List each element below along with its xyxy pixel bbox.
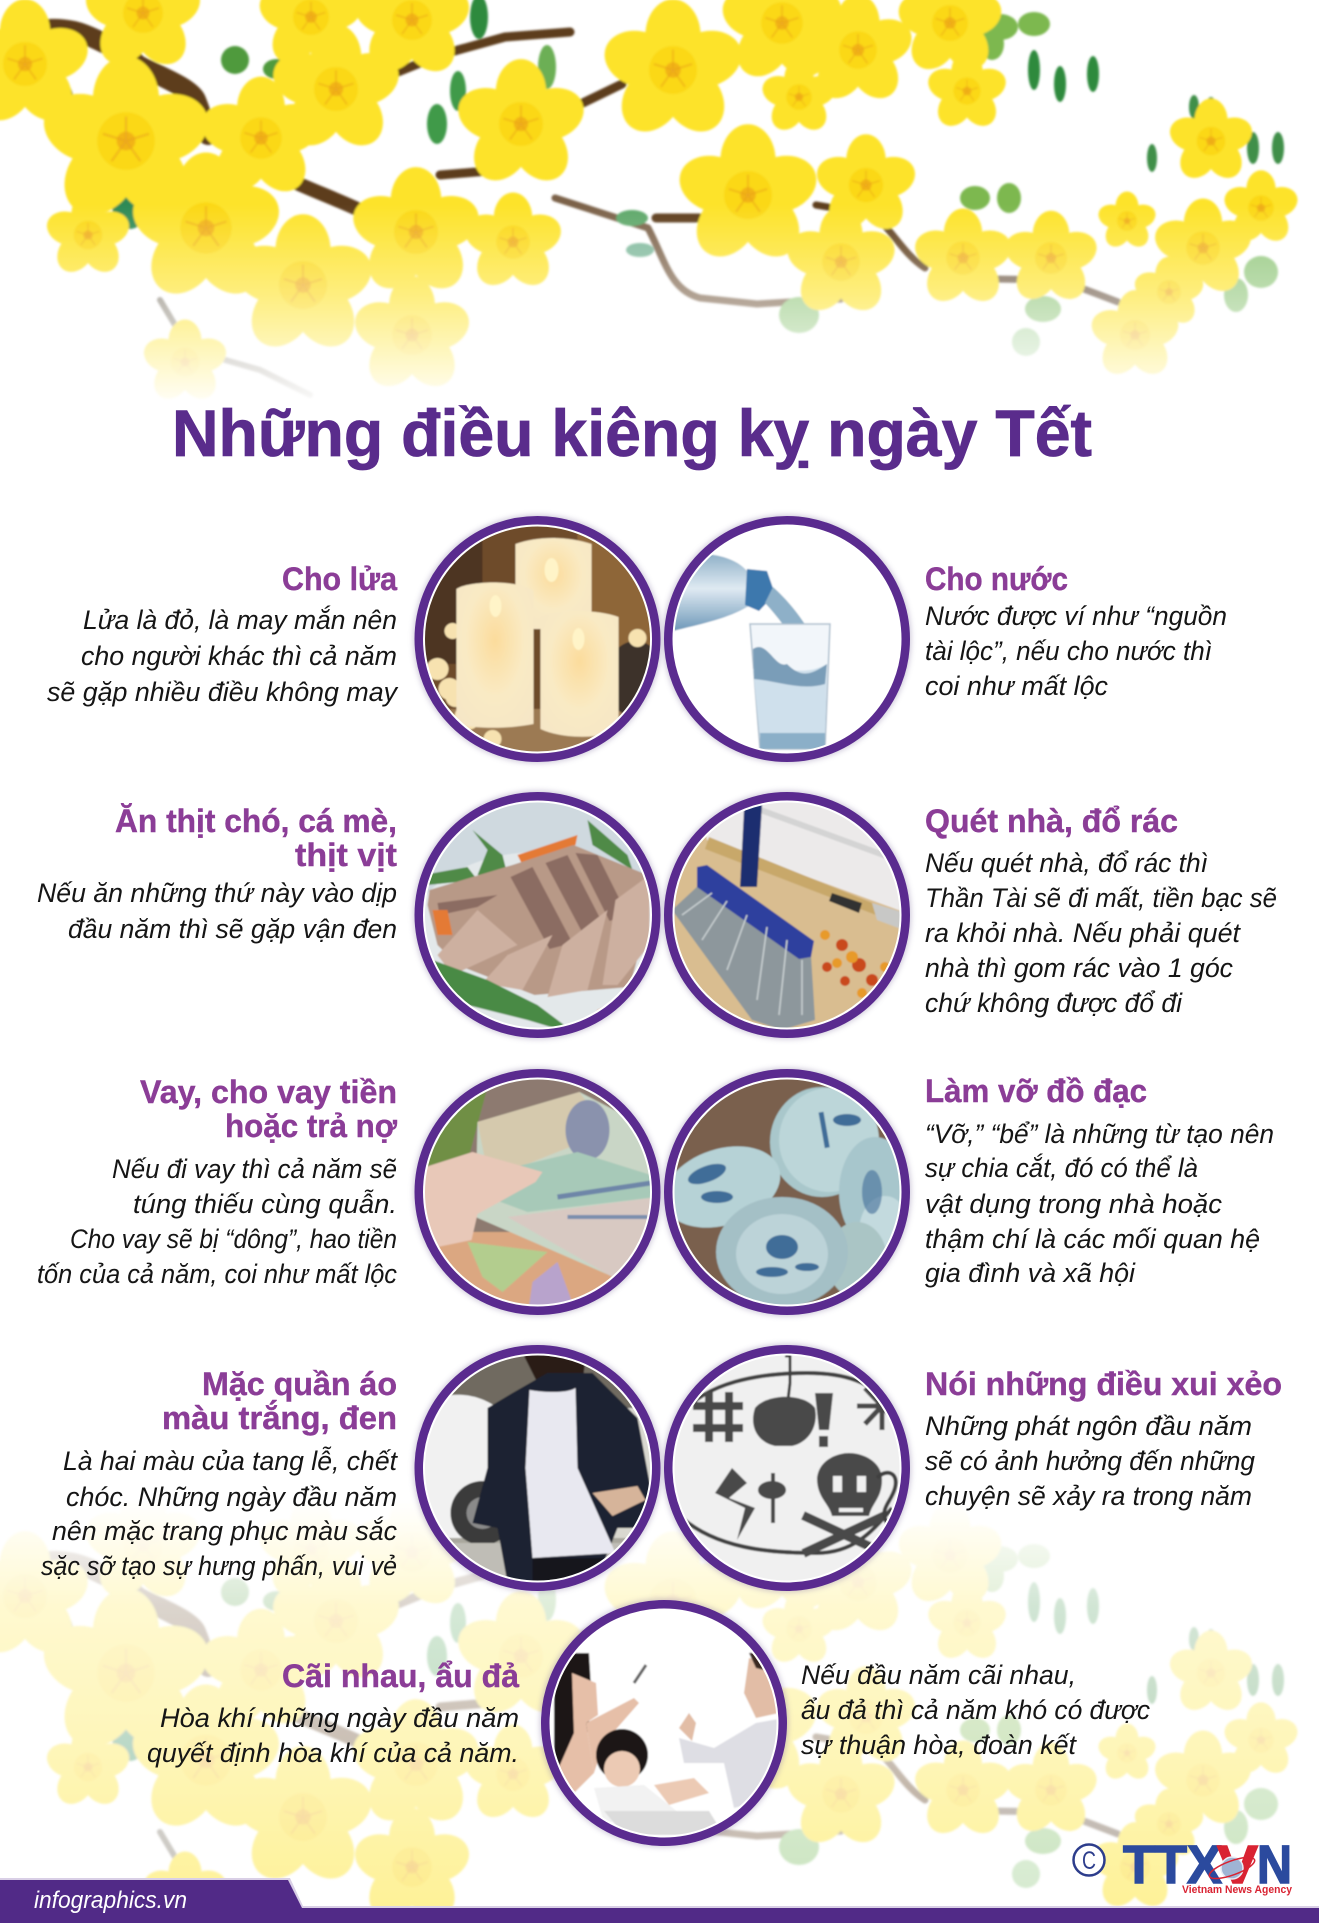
icon: copyright mark	[1074, 1844, 1104, 1876]
text: cãi nhau right description: sự thuận hòa, đoàn kết	[801, 1730, 1077, 1760]
text: mặc quần áo description: sặc sỡ tạo sự hưng phấn, vui vẻ	[41, 1551, 397, 1581]
heading: ăn thịt chó	[115, 803, 397, 873]
icon: copyright mark: C	[1082, 1847, 1096, 1875]
text: quét nhà description: nhà thì gom rác vào 1 góc	[925, 953, 1233, 983]
heading: vay tiền	[140, 1074, 397, 1144]
text: mặc quần áo description: nên mặc trang phục màu sắc	[52, 1515, 397, 1546]
tagline: vietnam news agency: Vietnam News Agency	[1182, 1884, 1293, 1896]
text: vay tiền description: Nếu đi vay thì cả năm sẽ	[112, 1154, 397, 1184]
text: làm vỡ description: vật dụng trong nhà hoặc	[925, 1189, 1223, 1219]
text: vay tiền description: tốn của cả năm, coi như mất lộc	[37, 1259, 397, 1289]
heading: ăn thịt chó: thịt vịt	[295, 837, 397, 873]
wordmark: TTXVN: V	[1217, 1835, 1258, 1895]
panel: vay, cho vay tiền	[37, 1067, 662, 1322]
text: vay tiền description	[37, 1154, 397, 1289]
illustration: bottom faded apricot blossom branch	[0, 1519, 1298, 1906]
heading: mặc quần áo: Mặc quần áo	[202, 1366, 397, 1402]
heading: ăn thịt chó: Ăn thịt chó, cá mè,	[115, 803, 397, 839]
text: cho lửa description: Lửa là đỏ, là may mắn nên	[83, 604, 397, 635]
photo: water poured in glass	[662, 514, 912, 764]
text: cho nước description: Nước được ví như “nguồn	[925, 601, 1227, 631]
title: Những điều kiêng kỵ ngày Tết	[172, 396, 1092, 470]
wordmark: TTXVN: TTX	[1123, 1835, 1222, 1895]
text: quét nhà description: Nếu quét nhà, đổ rác thì	[925, 848, 1208, 878]
text: quét nhà description: chứ không được đổ đi	[925, 988, 1183, 1018]
heading: nói điều xui xẻo: Nói những điều xui xẻo	[925, 1366, 1282, 1402]
text: quét nhà description: ra khỏi nhà. Nếu phải quét	[925, 918, 1241, 948]
photo: sliced duck	[408, 790, 668, 1040]
panel: ăn thịt chó, cá mè, thịt vịt	[37, 790, 668, 1040]
heading: làm vỡ đồ đạc: Làm vỡ đồ đạc	[925, 1073, 1147, 1109]
text: cho lửa description: sẽ gặp nhiều điều không may	[47, 677, 398, 707]
text: làm vỡ description: “Vỡ,” “bể” là những từ tạo nên	[925, 1119, 1274, 1149]
text: cho lửa description	[47, 604, 398, 707]
photo: broom sweeping	[662, 790, 912, 1040]
heading: mặc quần áo: màu trắng, đen	[162, 1400, 397, 1436]
heading: mặc quần áo	[162, 1366, 397, 1436]
text: ăn thịt chó description	[37, 878, 397, 944]
text: mặc quần áo description	[41, 1445, 398, 1581]
text: cãi nhau right description: Nếu đầu năm cãi nhau,	[801, 1660, 1076, 1690]
heading: cho nước: Cho nước	[925, 561, 1068, 597]
photo: banknotes in hand	[412, 1067, 662, 1322]
panel: cho nước	[662, 514, 1227, 764]
wordmark: TTXVN: N	[1257, 1835, 1292, 1895]
photo: woman in black and white	[412, 1343, 662, 1593]
photo: family arguing	[539, 1598, 789, 1848]
text: nói điều xui xẻo description: Những phát ngôn đầu năm	[925, 1411, 1252, 1441]
panel: mặc quần áo trắng đen	[41, 1343, 662, 1593]
text: cho nước description: tài lộc”, nếu cho nước thì	[925, 636, 1212, 666]
heading: vay tiền: Vay, cho vay tiền	[140, 1074, 397, 1110]
text: cãi nhau left description: quyết định hòa khí của cả năm.	[147, 1738, 519, 1768]
text: vay tiền description: Cho vay sẽ bị “dông”, hao tiền	[70, 1224, 397, 1254]
text: mặc quần áo description: Là hai màu của tang lễ, chết	[63, 1445, 398, 1476]
heading: quét nhà: Quét nhà, đổ rác	[925, 803, 1178, 839]
panel: quét nhà, đổ rác	[662, 790, 1277, 1040]
footer text: infographics.vn: infographics.vn	[34, 1887, 187, 1914]
photo: curse symbols speech balloon	[662, 1343, 912, 1593]
text: làm vỡ description	[925, 1119, 1274, 1288]
text: quét nhà description	[925, 848, 1277, 1018]
text: ăn thịt chó description: đầu năm thì sẽ gặp vận đen	[68, 914, 397, 944]
text: mặc quần áo description: chóc. Những ngày đầu năm	[66, 1482, 397, 1512]
text: quét nhà description: Thần Tài sẽ đi mất, tiền bạc sẽ	[925, 883, 1277, 913]
text: nói điều xui xẻo description: sẽ có ảnh hưởng đến những	[925, 1446, 1255, 1476]
wordmark: TTXVN	[1123, 1835, 1292, 1895]
illustration: top apricot blossom branch	[0, 0, 1301, 406]
panel: cãi nhau, ẩu đả	[147, 1598, 1150, 1848]
text: cho nước description	[925, 601, 1227, 701]
photo: candles	[412, 514, 668, 769]
heading: cãi nhau: Cãi nhau, ẩu đả	[282, 1658, 519, 1694]
text: làm vỡ description: thậm chí là các mối quan hệ	[925, 1224, 1260, 1254]
text: cho nước description: coi như mất lộc	[925, 671, 1108, 701]
text: ăn thịt chó description: Nếu ăn những thứ này vào dịp	[37, 878, 397, 908]
text: vay tiền description: túng thiếu cùng quẫn.	[133, 1189, 397, 1219]
text: làm vỡ description: sự chia cắt, đó có thể là	[925, 1152, 1198, 1183]
icon: globe	[1207, 1853, 1257, 1883]
text: cãi nhau left description: Hòa khí những ngày đầu năm	[160, 1703, 519, 1733]
heading: cho lửa: Cho lửa	[282, 561, 397, 597]
photo: broken plates	[653, 1067, 912, 1317]
text: cãi nhau left description	[147, 1703, 519, 1768]
footer bar	[0, 1878, 1319, 1923]
text: cho lửa description: cho người khác thì cả năm	[81, 641, 397, 671]
heading: vay tiền: hoặc trả nợ	[225, 1108, 397, 1144]
panel: nói những điều xui xẻo	[662, 1343, 1282, 1593]
text: cãi nhau right description: ẩu đả thì cả năm khó có được	[801, 1695, 1150, 1725]
text: nói điều xui xẻo description: chuyện sẽ xảy ra trong năm	[925, 1481, 1252, 1511]
logo: TTXVN	[1074, 1835, 1293, 1896]
panel: cho lửa	[47, 514, 668, 769]
panel: làm vỡ đồ đạc	[653, 1067, 1274, 1317]
text: làm vỡ description: gia đình và xã hội	[925, 1258, 1136, 1288]
text: cãi nhau right description	[801, 1660, 1150, 1760]
text: nói điều xui xẻo description	[925, 1411, 1255, 1511]
